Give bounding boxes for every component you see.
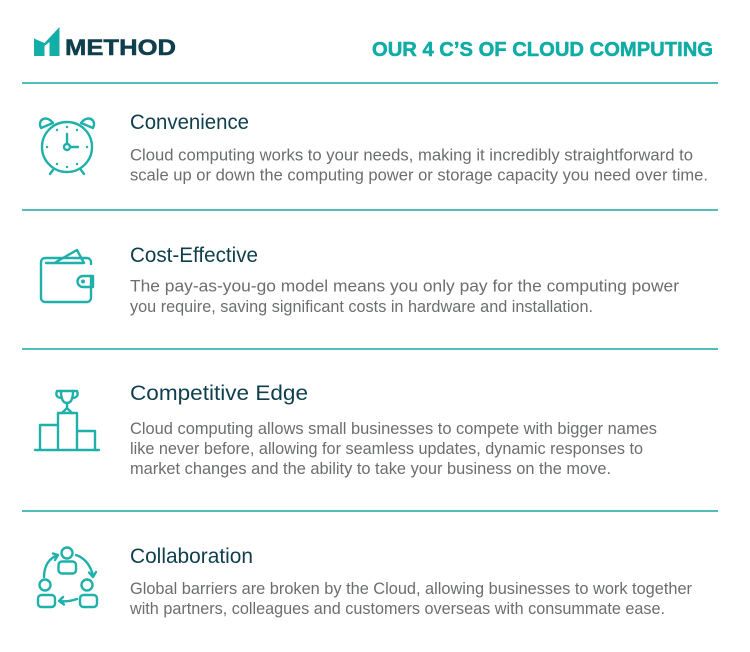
text: convenience: Cloud computing works to your needs, making it incredibly straightforward to — [130, 146, 693, 164]
heading: collaboration: Collaboration — [130, 544, 253, 568]
icon: wallet — [41, 250, 93, 302]
logo: Method — [34, 27, 176, 60]
text: collaboration: Global barriers are broken by the Cloud, allowing businesses to work together — [130, 579, 692, 598]
text: competitive edge: market changes and the ability to take your business on the move. — [130, 459, 611, 478]
text: collaboration — [129, 579, 692, 618]
title: OUR 4 C’S OF CLOUD COMPUTING — [372, 39, 713, 61]
text: competitive edge — [130, 419, 657, 478]
text: cost-effective — [130, 276, 679, 316]
heading: competitive edge: Competitive Edge — [130, 381, 308, 405]
text: collaboration: with partners, colleagues and customers overseas with consummate ease. — [129, 599, 665, 618]
text: competitive edge: like never before, allowing for seamless updates, dynamic responses to — [130, 439, 643, 458]
text: convenience — [130, 146, 708, 184]
text: cost-effective: you require, saving significant costs in hardware and installation. — [130, 297, 593, 316]
logo mark — [34, 27, 60, 56]
logo wordmark: METHOD — [65, 35, 176, 60]
heading: cost-effective: Cost-Effective — [130, 243, 258, 267]
heading: convenience: Convenience — [130, 110, 249, 134]
panel: convenience — [40, 110, 708, 184]
text: competitive edge: Cloud computing allows small businesses to compete with bigger names — [130, 419, 657, 438]
panel: cost-effective — [41, 243, 679, 316]
icon: people cycle — [38, 548, 97, 607]
icon: alarm clock — [40, 119, 94, 174]
text: cost-effective: The pay-as-you-go model means you only pay for the computing power — [130, 276, 679, 296]
panel: collaboration — [38, 544, 692, 618]
panel: competitive edge — [35, 381, 657, 478]
icon: trophy podium — [35, 391, 99, 450]
text: convenience: scale up or down the computing power or storage capacity you need over time. — [130, 166, 708, 184]
